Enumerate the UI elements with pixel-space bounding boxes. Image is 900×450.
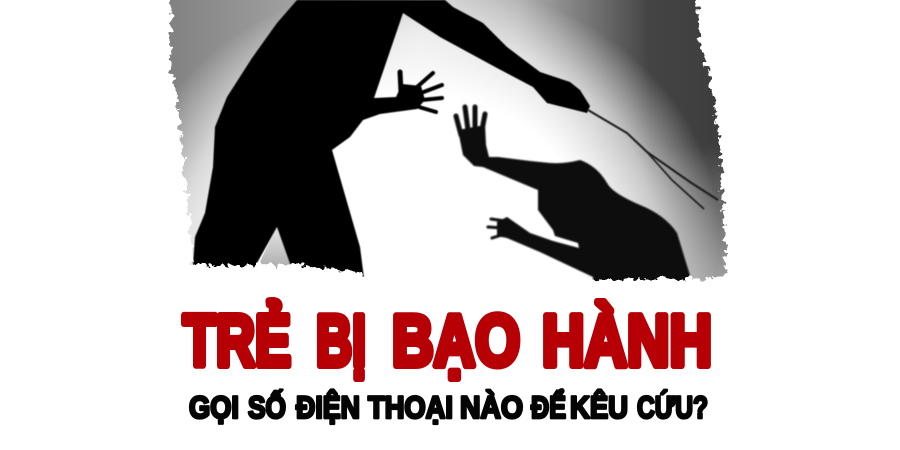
silhouette: crouching child with raised hands bbox=[456, 107, 692, 282]
subtitle: ĐỂ bbox=[531, 389, 566, 425]
subtitle: ĐIỆN bbox=[296, 389, 360, 425]
subtitle: NÀO bbox=[460, 389, 523, 425]
photo backdrop gradient bbox=[165, 0, 735, 290]
child lower hand fingers bbox=[488, 219, 505, 238]
subtitle: SỐ bbox=[248, 389, 286, 425]
title: BỊ bbox=[316, 302, 366, 382]
child raised hand fingers bbox=[456, 107, 485, 135]
adult hand fingers bbox=[400, 72, 442, 112]
subtitle: CỨU? bbox=[637, 389, 708, 425]
title: HÀNH bbox=[542, 302, 712, 382]
whip bbox=[588, 110, 718, 209]
subtitle: THOẠI bbox=[368, 389, 453, 425]
title: BẠO bbox=[392, 302, 520, 382]
gap between the adult's legs bbox=[255, 227, 295, 272]
subtitle: KÊU bbox=[570, 389, 628, 425]
title bbox=[183, 300, 712, 382]
silhouette: adult with raised whip arm bbox=[192, 0, 590, 278]
torn white paper edge around photo bbox=[0, 0, 900, 312]
title: TRẺ bbox=[183, 300, 291, 382]
photo: silhouette scene bbox=[165, 0, 735, 290]
subtitle: GỌI bbox=[189, 389, 239, 425]
subtitle bbox=[189, 389, 708, 425]
